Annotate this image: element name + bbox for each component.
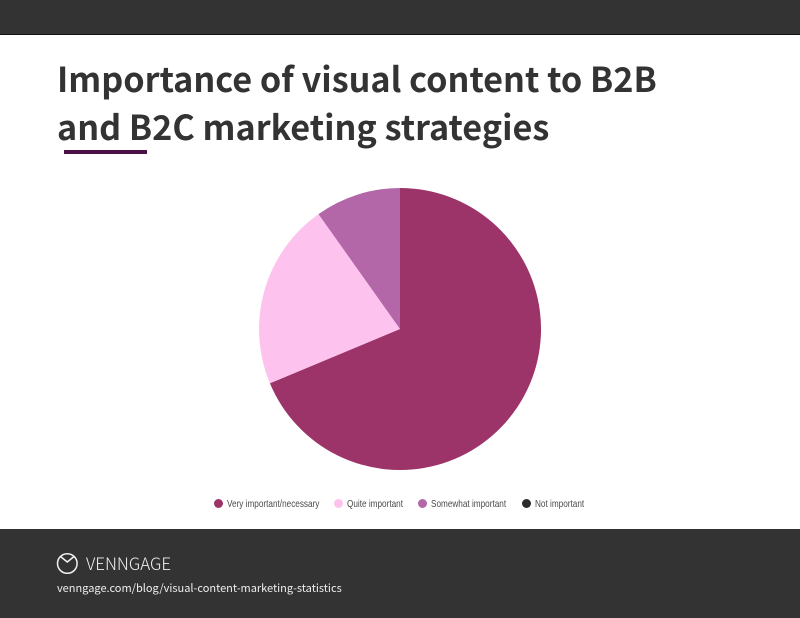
top header band xyxy=(0,0,800,35)
source url: venngage.com/blog/visual-content-marketing-statistics xyxy=(57,580,342,596)
slice: very important / necessary xyxy=(270,188,541,470)
title: and B2C marketing strategies xyxy=(57,100,549,150)
legend item: not important: Not important xyxy=(535,498,584,510)
slice: quite important xyxy=(259,214,400,383)
footer band xyxy=(0,529,800,618)
legend item: somewhat important: Somewhat important xyxy=(431,498,506,510)
slice: somewhat important xyxy=(318,188,400,329)
brand name: VENNGAGE xyxy=(86,550,171,575)
title underline accent xyxy=(64,150,147,154)
legend item: very important/necessary: Very important/necessary xyxy=(227,498,319,510)
title xyxy=(57,52,657,150)
title: Importance of visual content to B2B xyxy=(57,52,657,102)
icon: venngage logo xyxy=(56,553,78,574)
legend item: quite important: Quite important xyxy=(347,498,403,510)
legend xyxy=(214,498,584,510)
